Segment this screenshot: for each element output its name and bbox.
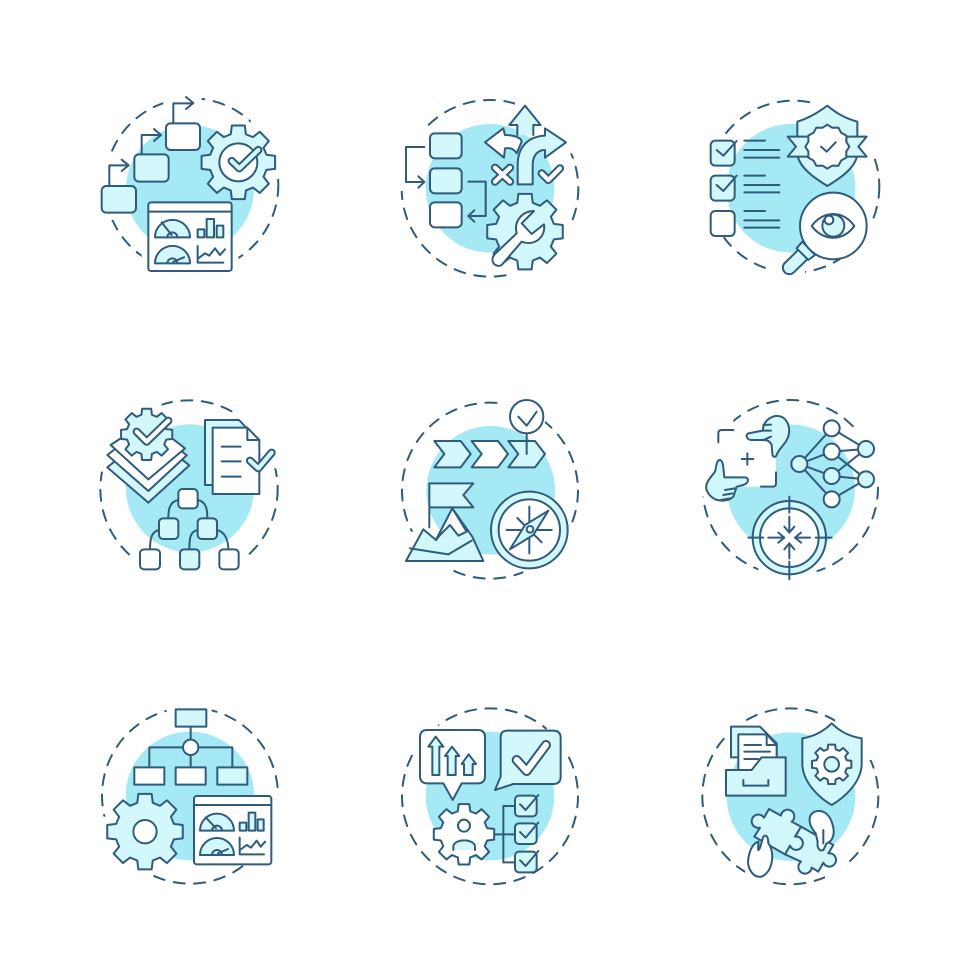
linked checklist — [494, 795, 538, 872]
check speech bubble — [495, 731, 561, 790]
background blob — [126, 125, 254, 253]
dashed ring — [695, 400, 897, 583]
folder with document — [726, 727, 786, 796]
icon: org structure with gear and dashboard — [90, 700, 290, 890]
icon: hand framing, neural network and focus target — [695, 400, 897, 583]
icon: decision paths with wrench gear — [390, 92, 592, 283]
hierarchy tree — [140, 489, 239, 569]
flag on mountain — [406, 483, 483, 561]
background blob — [426, 124, 554, 253]
stacked layers with gear — [107, 409, 189, 503]
dashed ring — [702, 708, 895, 887]
person gear — [434, 804, 494, 865]
background blob — [727, 732, 855, 861]
gear with wrench — [487, 194, 563, 269]
dashed ring — [97, 92, 291, 278]
dashed ring — [402, 708, 590, 884]
chevron steps — [434, 441, 545, 467]
icon set — [90, 92, 897, 890]
dashed ring — [90, 700, 290, 890]
magnifier with eye — [789, 193, 867, 268]
gear with check — [202, 126, 275, 199]
documents with check — [205, 420, 272, 494]
icon: growth feedback, team gear and checklist — [402, 708, 590, 884]
hands — [748, 811, 834, 877]
icon: layered standards, documents and hierarchy — [90, 397, 292, 580]
background blob — [426, 426, 555, 555]
dashed ring — [695, 92, 895, 282]
dashed ring — [390, 395, 590, 585]
frame with plus — [718, 430, 776, 487]
compass — [491, 492, 568, 568]
background blob — [727, 124, 855, 253]
framing hands — [706, 416, 789, 501]
focus target — [748, 497, 832, 579]
checklist — [711, 141, 779, 236]
stepped process boxes — [102, 97, 200, 213]
icon: goal roadmap with flag and compass — [390, 395, 590, 585]
background blob — [126, 732, 254, 860]
icon: quality checklist with shield and magnifier — [695, 92, 895, 282]
shield with gear — [802, 723, 862, 805]
neural network — [791, 420, 874, 507]
org chart — [134, 709, 247, 785]
dashboard — [194, 796, 271, 864]
background blob — [126, 424, 254, 552]
dashed ring — [90, 397, 292, 580]
background blob — [426, 732, 554, 860]
background blob — [727, 425, 855, 553]
puzzle pieces — [752, 809, 836, 874]
dashed ring — [390, 92, 592, 283]
cross and check marks — [495, 168, 560, 182]
growth speech bubble — [420, 730, 485, 800]
direction arrows — [485, 106, 566, 184]
gear — [107, 794, 183, 869]
shield with ribbon badge — [788, 106, 867, 186]
dashboard — [148, 202, 232, 271]
icon: folder, security shield and puzzle — [702, 708, 895, 887]
flow boxes with connectors — [406, 133, 486, 227]
icon: workflow process with gear and dashboard — [97, 92, 291, 278]
check pin — [510, 400, 543, 454]
